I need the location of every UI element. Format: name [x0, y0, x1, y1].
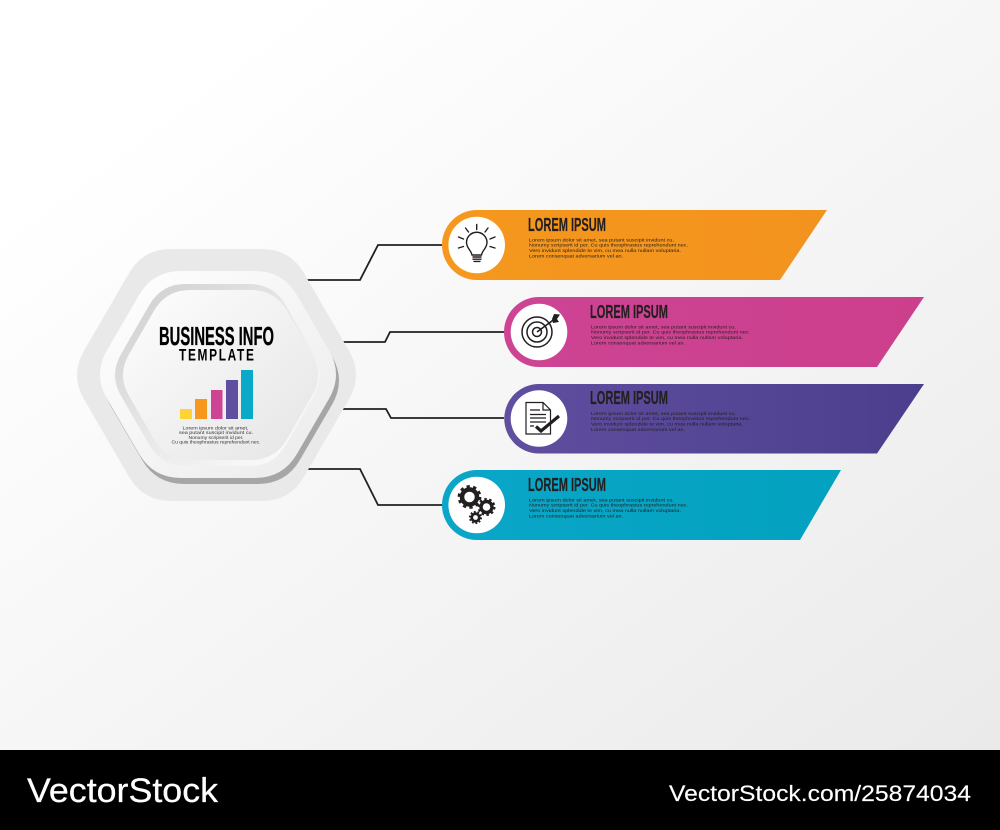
body text: Lorem consenquat adversarium vel an.	[591, 427, 685, 433]
hexagon outer layer	[77, 249, 356, 501]
body text: Vero invidunt splendide te vim, cu mea nulla nullam voluptaria.	[529, 248, 681, 254]
body text: Nonumy scripserit id per. Cu quis theophrastus reprehendunt nec.	[591, 330, 750, 336]
purple banner shape	[504, 384, 924, 454]
hexagon caption: sea putant suscipit invidunt cu.	[179, 430, 253, 436]
central hexagon panel	[77, 249, 356, 501]
teal banner shape	[442, 470, 841, 540]
bar chart	[180, 370, 253, 419]
panel: orange banner	[442, 210, 827, 280]
panel: teal banner	[442, 470, 841, 540]
panel: magenta banner	[504, 297, 924, 367]
body text	[529, 238, 688, 260]
icon circle	[448, 217, 505, 273]
body text: Nonumy scripserit id per. Cu quis theophrastus reprehendunt nec.	[591, 416, 750, 422]
panel: purple banner	[504, 384, 924, 454]
body text: Lorem consenquat adversarium vel an.	[591, 340, 685, 346]
subtitle: template: TEMPLATE	[179, 347, 256, 365]
body text: Nonumy scripserit id per. Cu quis theophrastus reprehendunt nec.	[529, 242, 688, 248]
icon: target	[522, 314, 560, 347]
body text	[591, 411, 750, 433]
hexagon middle layer	[100, 271, 336, 478]
icon: light bulb	[458, 224, 495, 261]
icon: document with check	[526, 402, 559, 434]
body text: Lorem ipsum dolor sit amet, sea putant suscipit invidunt cu.	[591, 324, 736, 330]
connector lines	[300, 245, 504, 505]
hexagon caption: Lorem ipsum dolor sit amet,	[182, 426, 248, 432]
body text: Vero invidunt splendide te vim, cu mea nulla nullam voluptaria.	[529, 508, 681, 514]
body text: Lorem ipsum dolor sit amet, sea putant suscipit invidunt cu.	[529, 238, 674, 244]
icon: gears	[459, 486, 494, 523]
hexagon inner ring	[115, 284, 320, 466]
heading: LOREM IPSUM	[590, 387, 668, 408]
body text	[591, 324, 750, 346]
body text: Lorem consenquat adversarium vel an.	[529, 254, 623, 260]
body text: Lorem consenquat adversarium vel an.	[529, 514, 623, 520]
hexagon caption: Cu quis theophrastus reprehendunt nec.	[172, 440, 260, 446]
hexagon caption	[172, 426, 260, 446]
icon circle	[448, 477, 505, 533]
heading: LOREM IPSUM	[528, 474, 606, 495]
footer logo text: VectorStock	[27, 772, 219, 810]
hexagon caption: Nonumy scripserit id per.	[188, 435, 244, 441]
hexagon shadow	[103, 277, 339, 484]
body text: Lorem ipsum dolor sit amet, sea putant suscipit invidunt cu.	[529, 498, 674, 504]
heading: LOREM IPSUM	[590, 301, 668, 322]
hexagon inner face	[123, 290, 318, 460]
footer url text: VectorStock.com/25874034	[669, 781, 971, 806]
footer bar	[0, 750, 1000, 830]
icon circle	[511, 304, 567, 360]
title: business info: BUSINESS INFO	[159, 321, 274, 351]
body text: Lorem ipsum dolor sit amet, sea putant suscipit invidunt cu.	[591, 411, 736, 417]
magenta banner shape	[504, 297, 924, 367]
orange banner shape	[442, 210, 827, 280]
heading: LOREM IPSUM	[528, 214, 606, 235]
body text	[529, 498, 688, 520]
body text: Nonumy scripserit id per. Cu quis theophrastus reprehendunt nec.	[529, 502, 688, 508]
body text: Vero invidunt splendide te vim, cu mea nulla nullam voluptaria.	[591, 422, 743, 428]
icon circle	[511, 390, 567, 447]
body text: Vero invidunt splendide te vim, cu mea nulla nullam voluptaria.	[591, 335, 743, 341]
